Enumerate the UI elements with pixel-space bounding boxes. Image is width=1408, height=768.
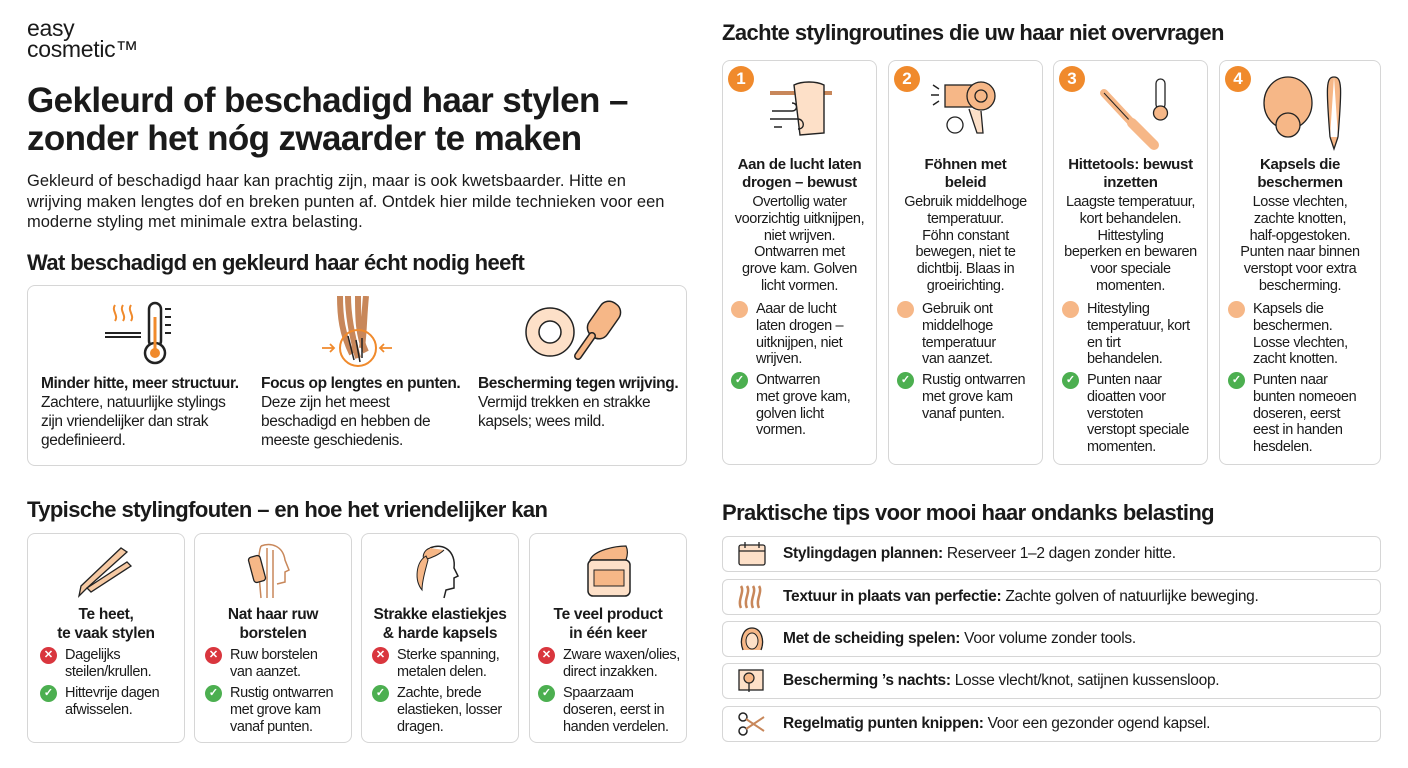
card: too much product: doseren, eerst in [563, 702, 664, 718]
text: lengths [261, 375, 460, 449]
card: step 3: ✓ [1066, 374, 1075, 386]
card: too hot: afwisselen. [65, 702, 132, 718]
card: step 1: grove kam. Golven [742, 261, 857, 277]
card: step 2: Föhnen met [924, 156, 1006, 173]
card: step 2: middelhoge [922, 318, 993, 334]
intro text: Gekleurd of beschadigd haar kan prachtig zijn, maar is ook kwetsbaarder. Hitte en [27, 172, 626, 190]
text: lengths: Deze zijn het meest [261, 394, 390, 411]
card: step 2: groeirichting. [927, 278, 1004, 294]
tip 1: Stylingdagen plannen: Reserveer 1–2 dagen zonder hitte. [783, 545, 1176, 562]
card: too much product: ✓ [542, 687, 551, 699]
card: step 2: vanaf punten. [922, 406, 1005, 422]
card: step 4: bunten nomeoen [1253, 389, 1356, 405]
card: too hot: Hittevrije dagen [65, 685, 159, 701]
card: tight elastics: ✕ [376, 649, 385, 661]
card: step 2: ✓ [901, 374, 910, 386]
card: step 1: licht vormen. [761, 278, 838, 294]
card: step 3: momenten. [1087, 439, 1156, 455]
tip 5: Regelmatig punten knippen: Voor een gezonder ogend kapsel. [783, 715, 1210, 732]
tip 3 [722, 621, 1381, 657]
text: less heat: Zachtere, natuurlijke stylings [41, 394, 225, 411]
card: step 4: doseren, eerst [1253, 406, 1340, 422]
card: step 4: Losse vlechten, [1253, 194, 1347, 210]
text: less heat: Minder hitte, meer structuur. [41, 375, 239, 392]
card: step 2 [888, 60, 1043, 465]
card: step 2: beleid [945, 174, 986, 190]
card: step 2: bewegen, niet te [915, 244, 1016, 260]
card: wet brushing: ✕ [209, 649, 218, 661]
card: step 4: zachte knotten, [1254, 211, 1346, 227]
card: step 1 [722, 60, 877, 465]
card: step 2: 2 [902, 69, 912, 88]
logo: easy [27, 15, 74, 41]
card: wet brushing: Ruw borstelen [230, 647, 318, 663]
card: wet brushing: met grove kam [230, 702, 321, 718]
card: too hot: ✓ [44, 687, 53, 699]
card: tight elastics: metalen delen. [397, 664, 487, 680]
card: step 3: Laagste temperatuur, [1066, 194, 1195, 210]
card: too hot: te vaak stylen [57, 625, 155, 642]
card: step 3: 3 [1067, 69, 1077, 88]
heading: needs: Wat beschadigd en gekleurd haar écht nodig heeft [27, 250, 524, 275]
icon: brushing wet hair [248, 544, 290, 598]
card: too much product [529, 533, 687, 743]
card: step 3: kort behandelen. [1080, 211, 1181, 227]
tip 4: Bescherming ’s nachts: Losse vlecht/knot, satijnen kussensloop. [783, 672, 1219, 689]
card: too much product: direct inzakken. [563, 664, 657, 680]
card: wet brushing: ✓ [209, 687, 218, 699]
card: step 4: bescherming. [1259, 278, 1341, 294]
card: step 4: beschermen [1257, 174, 1343, 190]
card: step 1: Overtollig water [752, 194, 847, 210]
card: too hot [27, 533, 185, 743]
text: less heat: zijn vriendelijker dan strak [41, 413, 208, 430]
card: step 2: dichtbij. Blaas in [917, 261, 1014, 277]
card: step 3: inzetten [1103, 174, 1158, 190]
card: step 4: ✓ [1232, 374, 1241, 386]
title [27, 81, 628, 158]
card: step 4: verstopt voor extra [1244, 261, 1356, 277]
card: wet brushing: Nat haar ruw [228, 606, 318, 623]
card: step 4 [1219, 60, 1381, 465]
card: step 1: Ontwarren met [754, 244, 845, 260]
card: step 3 [1053, 60, 1208, 465]
text: lengths: meeste geschiedenis. [261, 432, 403, 449]
card: step 1: Ontwarren [756, 372, 820, 388]
card: step 1: 1 [736, 69, 746, 88]
icon: scrunchie and brush [525, 300, 622, 360]
card: step 4: beschermen. [1253, 318, 1332, 334]
card: step 1: voorzichtig uitknijpen, [735, 211, 864, 227]
card: step 3: behandelen. [1087, 351, 1162, 367]
text: friction: Bescherming tegen wrijving. [478, 375, 678, 392]
icon: ponytail [416, 546, 459, 598]
icon: curling iron [1100, 78, 1168, 150]
card: step 1: Aaar de lucht [756, 301, 836, 317]
card: step 4: hesdelen. [1253, 439, 1312, 455]
card: step 1: drogen – bewust [742, 174, 857, 190]
card: too hot: Te heet, [78, 606, 134, 623]
heading: mistakes: Typische stylingfouten – en hoe het vriendelijker kan [27, 497, 547, 522]
title: zonder het nóg zwaarder te maken [27, 119, 582, 158]
card: step 3: en tirt [1087, 335, 1120, 351]
card: step 1: ✓ [735, 374, 744, 386]
card: step 1: wrijven. [756, 351, 802, 367]
card: step 4: 4 [1233, 69, 1243, 88]
card: tight elastics: Sterke spanning, [397, 647, 499, 663]
card: step 2: met grove kam [922, 389, 1013, 405]
card: step 3: dioatten voor [1087, 389, 1166, 405]
card: too much product: handen verdelen. [563, 719, 669, 735]
card: step 3: Hitestyling [1087, 301, 1150, 317]
title: Gekleurd of beschadigd haar stylen – [27, 81, 628, 120]
intro text: moderne styling met minimale extra belasting. [27, 213, 363, 231]
intro text: wrijving maken lengtes dof en breken punten af. Ontdek hier milde technieken voor een [27, 192, 664, 210]
card: step 4: Punten naar [1253, 372, 1328, 388]
card: step 2: van aanzet. [922, 351, 993, 367]
card: step 3: verstopt speciale [1087, 422, 1189, 438]
card: step 3: Punten naar [1087, 372, 1162, 388]
card: step 4: Kapsels die [1260, 156, 1340, 173]
card: tight elastics: elastieken, losser [397, 702, 502, 718]
card: too hot: ✕ [44, 649, 53, 661]
card: too much product: Zware waxen/olies, [563, 647, 680, 663]
logo: cosmetic™ [27, 36, 138, 62]
card: too hot: steilen/krullen. [65, 664, 151, 680]
card: wet brushing [194, 533, 352, 743]
icon: straightener [78, 547, 132, 598]
icon: jar [587, 545, 631, 597]
text: friction: kapsels; wees mild. [478, 413, 605, 430]
tip 5 [722, 706, 1381, 742]
card: step 1: Aan de lucht laten [738, 156, 861, 173]
heading: routines: Zachte stylingroutines die uw haar niet overvragen [722, 20, 1224, 45]
text: friction [478, 375, 678, 430]
card: step 3: momenten. [1096, 278, 1165, 294]
tip 2 [722, 579, 1381, 615]
card: step 4: half-opgestoken. [1250, 228, 1350, 244]
card: step 4: Kapsels die [1253, 301, 1324, 317]
logo [27, 15, 138, 62]
tip 3: Met de scheiding spelen: Voor volume zonder tools. [783, 630, 1136, 647]
card: wet brushing: borstelen [239, 625, 307, 642]
card: step 3: Hittestyling [1097, 228, 1164, 244]
card: step 2: Gebruik middelhoge [904, 194, 1027, 210]
card: step 2: Rustig ontwarren [922, 372, 1025, 388]
card: step 2: Föhn constant [922, 228, 1009, 244]
card: tight elastics [361, 533, 519, 743]
card: too hot: Dagelijks [65, 647, 120, 663]
card: too much product: in één keer [569, 625, 647, 642]
card: step 1: niet wrijven. [764, 228, 835, 244]
card: step 1: golven licht [756, 406, 824, 422]
card: step 2: temperatuur [922, 335, 996, 351]
intro text [27, 172, 664, 231]
card: tight elastics: Zachte, brede [397, 685, 481, 701]
card: tight elastics: ✓ [376, 687, 385, 699]
card: step 4: eest in handen [1253, 422, 1343, 438]
text: friction: Vermijd trekken en strakke [478, 394, 650, 411]
card: step 4: Losse vlechten, [1253, 335, 1348, 351]
card: step 3: voor speciale [1090, 261, 1171, 277]
card: too much product: Spaarzaam [563, 685, 634, 701]
panel: needs [27, 285, 687, 466]
card: too much product: Te veel product [554, 606, 662, 623]
text: lengths: Focus op lengtes en punten. [261, 375, 460, 392]
card: tight elastics: Strakke elastiekjes [373, 606, 507, 623]
card: step 3: temperatuur, kort [1087, 318, 1190, 334]
card: step 1: laten drogen – [756, 318, 843, 334]
card: too much product: ✕ [542, 649, 551, 661]
text: lengths: beschadigd en hebben de [261, 413, 430, 430]
card: step 4: zacht knotten. [1253, 351, 1338, 367]
icon: bun and braid [1263, 76, 1342, 151]
tip 4 [722, 663, 1381, 699]
icon: towel wind [770, 81, 832, 136]
card: step 1: vormen. [756, 422, 806, 438]
card: step 2: Gebruik ont [922, 301, 993, 317]
text: less heat: gedefinieerd. [41, 432, 125, 449]
card: tight elastics: & harde kapsels [383, 625, 497, 642]
tip 2: Textuur in plaats van perfectie: Zachte golven of natuurlijke beweging. [783, 588, 1259, 605]
card: step 1: uitknijpen, niet [756, 335, 842, 351]
card: tight elastics: dragen. [397, 719, 443, 735]
card: step 2: temperatuur. [927, 211, 1004, 227]
card: wet brushing: vanaf punten. [230, 719, 313, 735]
card: wet brushing: van aanzet. [230, 664, 301, 680]
card: step 3: beperken en bewaren [1064, 244, 1197, 260]
icon: heat thermometer [105, 302, 171, 364]
icon: hair ends [322, 296, 392, 367]
tip 1 [722, 536, 1381, 572]
card: step 4: Punten naar binnen [1240, 244, 1360, 260]
card: step 3: verstoten [1087, 406, 1143, 422]
card: wet brushing: Rustig ontwarren [230, 685, 333, 701]
card: step 3: Hittetools: bewust [1068, 156, 1193, 173]
heading: tips: Praktische tips voor mooi haar ondanks belasting [722, 500, 1214, 525]
card: step 1: met grove kam, [756, 389, 850, 405]
icon: hair dryer [931, 81, 996, 134]
text: less heat [41, 375, 239, 449]
